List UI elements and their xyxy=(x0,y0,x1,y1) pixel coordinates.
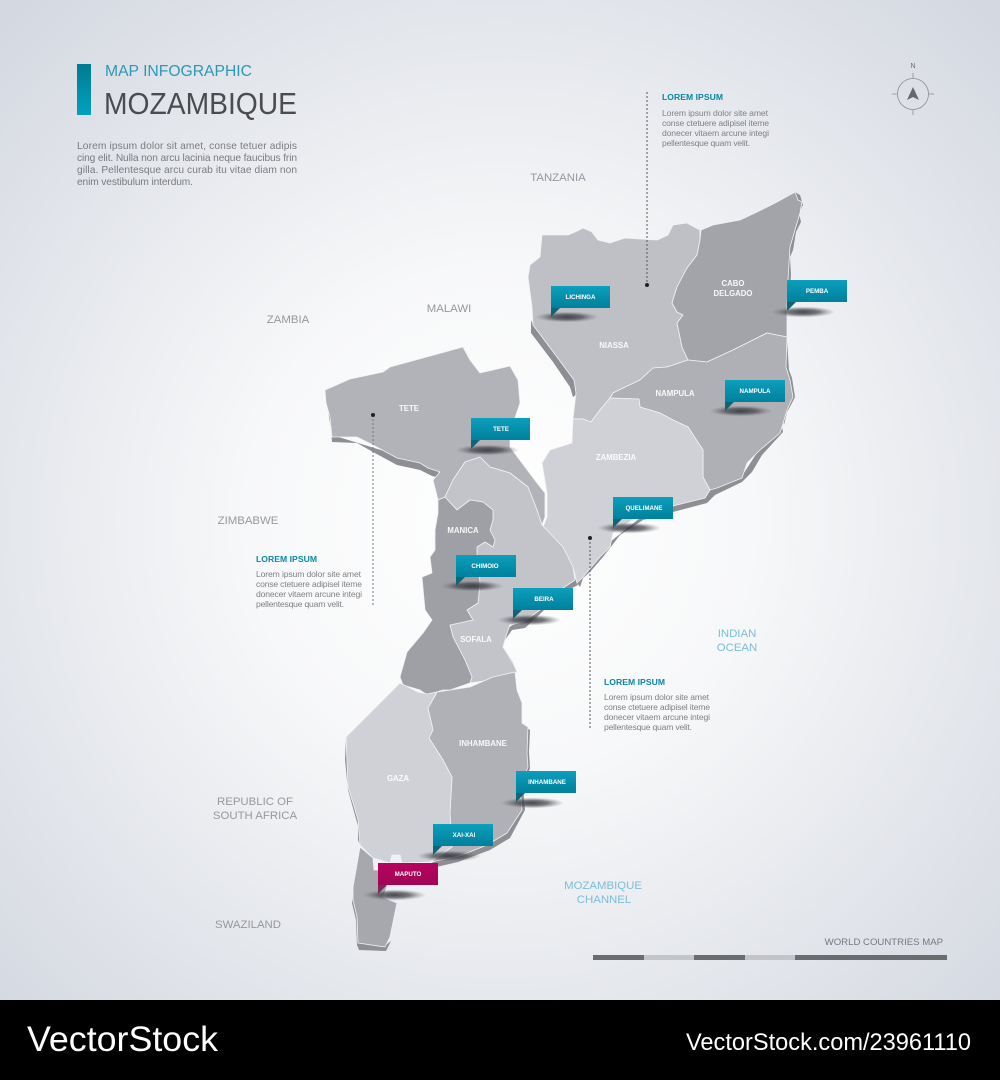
callout: north: donecer vitaem arcune integi xyxy=(662,128,769,138)
sea labels: MOZAMBIQUE xyxy=(564,880,642,892)
callout: south east: pellentesque quam velit. xyxy=(604,722,692,732)
region: Maputo xyxy=(353,847,397,947)
neighbouring country labels: TANZANIA xyxy=(530,172,586,184)
title block xyxy=(77,63,297,121)
flag: Tete xyxy=(455,418,530,456)
region: Zambezia xyxy=(542,398,710,583)
region: Nampula xyxy=(610,333,793,490)
flag: Chimoio xyxy=(440,555,516,592)
neighbouring country labels: ZIMBABWE xyxy=(218,515,279,527)
region labels: GAZA xyxy=(387,774,409,783)
flag: Chimoio: CHIMOIO xyxy=(471,563,499,570)
region labels: DELGADO xyxy=(714,289,752,298)
callout: west xyxy=(256,413,375,609)
intro text: enim vestibulum interdum. xyxy=(77,177,193,188)
flag: Quelimane xyxy=(597,497,673,534)
flag: Maputo (capital): MAPUTO xyxy=(395,871,422,878)
flag: Nampula: NAMPULA xyxy=(740,388,771,395)
title block: MOZAMBIQUE xyxy=(104,86,297,121)
neighbouring country labels: SOUTH AFRICA xyxy=(213,810,297,822)
callout: north: conse ctetuere adipisel iteme xyxy=(662,118,769,128)
callout: west: donecer vitaem arcune integi xyxy=(256,589,362,599)
flag: Xai-Xai: XAI-XAI xyxy=(453,832,476,839)
callout: north xyxy=(645,92,769,287)
callout: west: Lorem ipsum dolor site amet xyxy=(256,569,362,579)
intro text: gilla. Pellentesque arcu curab itu vitae diam non xyxy=(77,165,297,176)
callout: north: LOREM IPSUM xyxy=(662,92,723,102)
neighbouring country labels xyxy=(213,172,586,931)
flag: Pemba: PEMBA xyxy=(806,288,829,295)
icon: compass xyxy=(892,63,934,115)
intro text xyxy=(77,141,297,188)
intro text: cing elit. Nulla non arcu lacinia neque faucibus frin xyxy=(77,153,297,164)
callout: south east: Lorem ipsum dolor site amet xyxy=(604,692,710,702)
flag: Xai-Xai xyxy=(417,824,493,862)
region: Gaza xyxy=(346,683,452,863)
flag: Beira: BEIRA xyxy=(534,596,554,603)
flag: Inhambane: INHAMBANE xyxy=(528,779,566,786)
region labels: NAMPULA xyxy=(656,389,695,398)
footer watermark: VectorStock xyxy=(27,1020,219,1059)
flag: Nampula xyxy=(709,380,785,416)
region labels: SOFALA xyxy=(460,635,492,644)
region labels: TETE xyxy=(399,404,419,413)
scale bar: WORLD COUNTRIES MAP xyxy=(825,937,943,948)
sea labels: INDIAN xyxy=(718,628,756,640)
callout: south east: donecer vitaem arcune integi xyxy=(604,712,710,722)
callout: south east xyxy=(588,536,710,732)
footer watermark xyxy=(0,1000,1000,1080)
flag: Inhambane xyxy=(500,771,576,808)
title block: MAP INFOGRAPHIC xyxy=(105,63,252,80)
callout: west: pellentesque quam velit. xyxy=(256,599,344,609)
flag: Lichinga xyxy=(535,286,610,322)
callout: south east: LOREM IPSUM xyxy=(604,677,665,687)
map of Mozambique provinces xyxy=(325,192,802,947)
region: Tete xyxy=(325,347,545,525)
neighbouring country labels: ZAMBIA xyxy=(267,314,310,326)
region labels: ZAMBEZIA xyxy=(596,453,637,462)
map extrusion edges xyxy=(325,192,803,951)
callout: north: pellentesque quam velit. xyxy=(662,138,750,148)
scale bar xyxy=(593,937,947,960)
sea labels: CHANNEL xyxy=(577,894,631,906)
flag: Pemba xyxy=(771,280,847,318)
callout: south east: conse ctetuere adipisel iteme xyxy=(604,702,710,712)
flag: Quelimane: QUELIMANE xyxy=(625,505,663,512)
flag: Maputo (capital) xyxy=(362,863,438,900)
sea labels xyxy=(564,628,757,906)
footer watermark: VectorStock.com/23961110 xyxy=(686,1029,971,1056)
region labels: INHAMBANE xyxy=(459,739,507,748)
region labels: CABO xyxy=(722,279,744,288)
flag: Beira xyxy=(497,588,573,626)
callout: west: LOREM IPSUM xyxy=(256,554,317,564)
flag: Tete: TETE xyxy=(493,426,509,433)
region: Sofala xyxy=(445,457,575,683)
region labels: NIASSA xyxy=(599,341,629,350)
region: Inhambane xyxy=(428,672,528,862)
sea labels: OCEAN xyxy=(717,642,757,654)
callout: north: Lorem ipsum dolor site amet xyxy=(662,108,769,118)
neighbouring country labels: SWAZILAND xyxy=(215,919,281,931)
region labels: MANICA xyxy=(447,526,479,535)
intro text: Lorem ipsum dolor sit amet, conse tetuer adipis xyxy=(77,141,297,152)
region: Cabo Delgado xyxy=(672,192,802,362)
flag: Lichinga: LICHINGA xyxy=(566,294,596,301)
region: Manica xyxy=(400,497,495,695)
neighbouring country labels: REPUBLIC OF xyxy=(217,796,293,808)
region labels xyxy=(387,279,752,783)
region: Niassa xyxy=(528,223,700,422)
neighbouring country labels: MALAWI xyxy=(427,303,471,315)
callout: west: conse ctetuere adipisel iteme xyxy=(256,579,362,589)
icon: compass: N xyxy=(910,63,916,70)
